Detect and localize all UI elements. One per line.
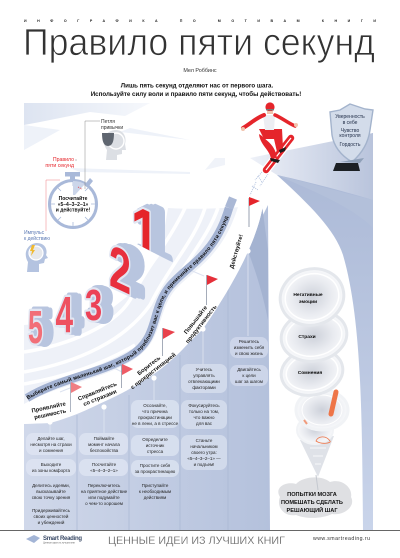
column 3 tips: что причина [142, 409, 168, 414]
tornado labels: эмоции [299, 300, 317, 305]
column 1 tips: своих ценностей [34, 513, 69, 519]
head [265, 102, 275, 112]
trophy: pride and confidence: контроля [339, 133, 361, 139]
column 2 tips: или подумайте [88, 494, 120, 500]
number 3: 3 [85, 282, 102, 330]
stopwatch [50, 172, 96, 228]
intro text: Используйте силу воли и правило пяти секунд, чтобы действовать! [91, 91, 301, 98]
column 1 tips: и сомнения [39, 448, 64, 453]
column 2 tips: Посчитайте [92, 461, 117, 467]
arms [243, 115, 264, 128]
swirling board [331, 392, 336, 414]
label: Импульс к действию: Импульс [24, 230, 45, 236]
number 3: 3 [92, 281, 109, 329]
column 4 tips: для вас [196, 421, 213, 426]
column 2 tips: Переключитесь [88, 483, 121, 488]
footer [0, 530, 400, 547]
tornado labels: Страхи [298, 334, 316, 340]
column 5 tips: к цели [242, 373, 256, 378]
number 2: 2 [114, 231, 136, 309]
column 5 tips: изменить себя [234, 345, 265, 350]
white lower run [24, 205, 263, 424]
skier [241, 102, 298, 195]
right blue strip [277, 133, 373, 530]
stopwatch: «5–4–3–2–1» [58, 202, 89, 208]
column 4 tips: начальником [190, 444, 218, 449]
column 4 tips: Станьте [196, 438, 213, 443]
trophy: pride and confidence: Чувство [341, 128, 360, 134]
brain cloud: ПОМЕШАТЬ СДЕЛАТЬ [281, 500, 343, 506]
road with text: Выберите самый маленький шаг, который приблизит вас к цели, и применяйте правило пяти секунд [26, 216, 229, 400]
number 5: 5 [32, 300, 46, 352]
column 2 tips: о чем-то хорошем [85, 501, 123, 506]
legs [259, 129, 283, 152]
label: Правило пяти секунд: пяти секунд [45, 163, 74, 169]
heading: Проявляйте решимость: Проявляйте [31, 400, 67, 415]
number 1: 1 [140, 187, 168, 283]
column 1 tips: Делитесь идеями, [32, 483, 70, 488]
snow spray [250, 172, 268, 195]
heading: Повышайте продуктивность: продуктивность [185, 304, 219, 345]
stopwatch: Посчитайте [59, 195, 88, 202]
column 3 tips: стресса [147, 449, 164, 454]
column 2 tips: на приятное действие [81, 488, 128, 494]
flag 1 [70, 382, 82, 412]
slope right side [248, 205, 268, 320]
number 5: 5 [34, 300, 49, 352]
column 1 tips: из зоны комфорта [32, 468, 71, 473]
trophy: pride and confidence: Гордость [340, 142, 361, 148]
footer: Ценные идеи из лучших книг [43, 542, 75, 544]
brand name: Smart Reading [43, 536, 82, 542]
column 3 tips: Осознайте, [143, 402, 167, 408]
number 1: 1 [136, 187, 164, 283]
number 2: 2 [122, 232, 144, 310]
number 3 [85, 281, 112, 330]
column 1 tips: Придерживайтесь [32, 507, 71, 513]
column 3 tips: Определите [142, 437, 168, 442]
column 4 tips: управлять [193, 373, 215, 378]
stopwatch: и действуйте! [56, 207, 91, 214]
column 4 tips: «5–4–3–2–1» — [187, 456, 221, 461]
brain cloud [278, 475, 352, 518]
logo [26, 535, 40, 543]
brain cloud: ПОПЫТКИ МОЗГА [287, 492, 337, 498]
column 5 tips: шаг за шагом [235, 379, 263, 384]
column 2 tips: беспокойства [90, 447, 119, 453]
cliff with snowboard launch [250, 133, 373, 228]
column 1 tips: несмотря на страхи [30, 442, 72, 447]
column dividers [77, 285, 228, 530]
number 1: 1 [131, 188, 159, 284]
column 3 tips: источник [146, 443, 164, 448]
number 1: 1 [144, 187, 172, 283]
number 5: 5 [38, 301, 52, 353]
trophy: pride and confidence [330, 104, 373, 171]
number 4: 4 [59, 285, 77, 342]
column 4 tips: и подъем! [194, 462, 214, 467]
brain cloud: РЕШАЮЩИЙ ШАГ [286, 506, 338, 514]
column 3 tips: Приступайте [142, 482, 169, 488]
author: Мел Роббинс [183, 68, 217, 74]
intro text: Лишь пять секунд отделяют нас от первого шага. [121, 82, 273, 90]
subtitle: ИНФОГРАФИКА ПО МОТИВАМ КНИГИ [24, 19, 376, 23]
heading: Действуйте: Действуйте! [228, 234, 245, 270]
label: Импульс к действию: к действию [24, 235, 50, 242]
number 1 [133, 204, 173, 262]
tornado [274, 262, 351, 477]
heading: Справляйтесь со страхами: со страхами [83, 389, 118, 408]
ski slope surface [24, 205, 263, 424]
column 4 tips: отвлекающими [188, 379, 220, 384]
sky background [24, 103, 225, 174]
column 2 tips: «5–4–3–2–1» [90, 468, 118, 473]
icon: impulse head [26, 243, 48, 272]
heading: Справляйтесь со страхами: Справляйтесь [77, 380, 118, 403]
column 1 tips: высказывайте [36, 488, 66, 494]
number 5: 5 [28, 301, 43, 353]
column 4 tips: что важно [194, 415, 215, 420]
trophy: pride and confidence: в себе [343, 120, 358, 126]
number 3: 3 [89, 281, 106, 329]
label: Петля привычки: привычки [101, 125, 123, 131]
trophy: pride and confidence: Уверенность [335, 114, 365, 120]
columns background [24, 205, 270, 530]
column 5 tips: и свою жизнь [235, 351, 264, 356]
tornado labels: Сомнения [298, 370, 322, 376]
torso [263, 115, 275, 130]
column 3 tips: за прокрастинацию [135, 469, 176, 474]
column 3 tips: Простите себя [140, 463, 171, 468]
column 2 tips: момент начала [88, 442, 120, 447]
number 4: 4 [56, 286, 73, 343]
column 1 tips [26, 433, 76, 525]
column 5 tips: Двигайтесь [237, 366, 261, 372]
column 5 tips [230, 337, 268, 386]
column 4 tips: своего утра: [191, 450, 217, 455]
label: Правило пяти секунд: Правило [53, 157, 74, 163]
impulse connector [46, 180, 60, 231]
flag 4 [206, 275, 218, 305]
header [23, 19, 376, 98]
column 3 tips: к необходимым [139, 489, 171, 494]
heading: Повышайте продуктивность: Повышайте [183, 304, 209, 336]
column 3 tips: не в лени, а в стрессе [132, 421, 179, 426]
title: Правило пяти секунд [23, 22, 375, 64]
heading: Боритесь с прокрастинацией: с прокрастинацией [129, 351, 178, 391]
column 3 tips: прокрастинации [138, 415, 172, 420]
flag 5 [249, 197, 260, 227]
column 1 tips: Делайте шаг, [37, 435, 65, 441]
column 3 tips: действиям [144, 494, 166, 500]
flag 3 [162, 328, 175, 356]
column 4 tips: только на том, [189, 409, 219, 414]
column 1 tips: и убеждений [38, 519, 65, 525]
label: Петля привычки: Петля [101, 119, 115, 125]
connector lines [75, 121, 100, 189]
flag 2 [122, 364, 133, 388]
number 3: 3 [95, 282, 112, 330]
column 4 tips: факторами [192, 385, 216, 390]
number 2: 2 [109, 231, 131, 309]
column 2 tips: Поймайте [94, 435, 115, 441]
website: www.smartreading.ru [313, 536, 370, 542]
snowboard [266, 138, 291, 170]
number 4 [56, 285, 83, 343]
number 2 [109, 231, 144, 310]
column 2 tips [79, 433, 128, 506]
column 5 tips: Решитесь [239, 339, 260, 344]
number 5 [28, 300, 52, 353]
column 1 tips: свою точку зрения [32, 495, 71, 500]
column 4 tips: Фокусируйтесь [188, 402, 220, 408]
column 3 tips [131, 400, 179, 500]
slope markers [47, 248, 251, 433]
icon: habit loop head [102, 130, 126, 160]
slogan: ЦЕННЫЕ ИДЕИ ИЗ ЛУЧШИХ КНИГ [108, 535, 285, 547]
number 2: 2 [118, 231, 140, 309]
number 4: 4 [62, 285, 80, 342]
column 4 tips [181, 364, 227, 470]
column 4 tips: Учитесь [196, 367, 213, 372]
heading: Проявляйте решимость: решимость [34, 408, 67, 421]
number 4: 4 [65, 286, 83, 343]
column 1 tips: Выходите [41, 462, 62, 467]
tornado labels: Негативные [293, 292, 323, 298]
heading: Боритесь с прокрастинацией: Боритесь [137, 355, 162, 377]
